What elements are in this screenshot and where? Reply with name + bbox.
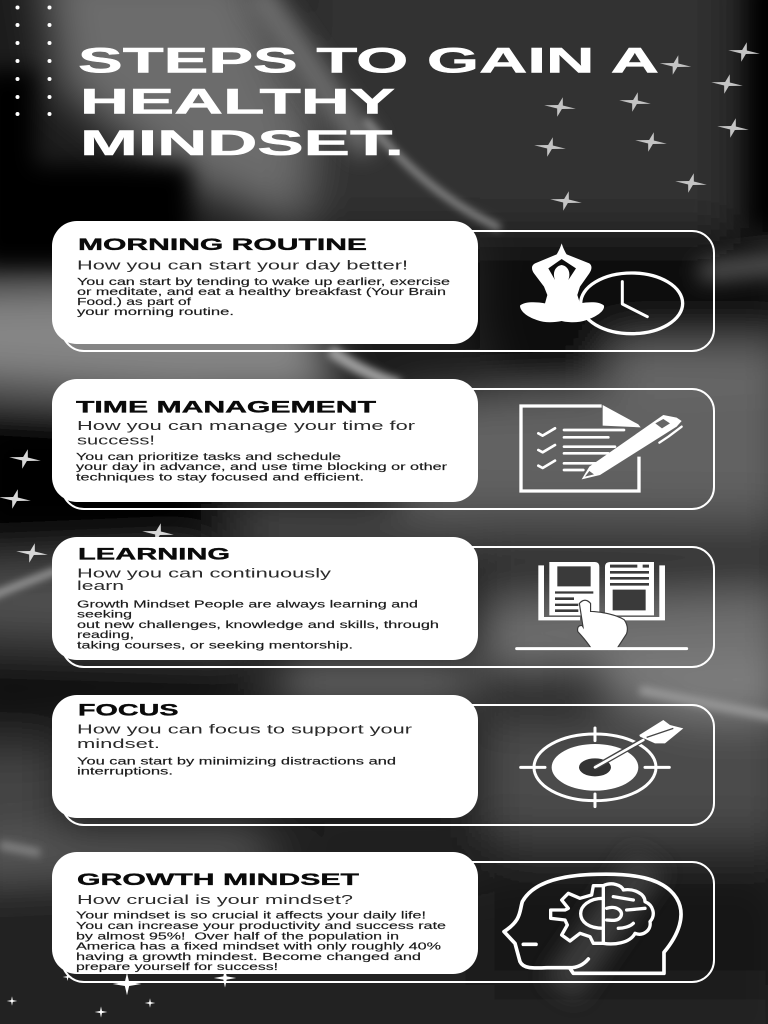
panel: growth mindset bbox=[52, 852, 714, 982]
heading: focus: FOCUS bbox=[78, 702, 178, 720]
body: learning: Growth Mindset People are always learning and bbox=[77, 600, 419, 610]
icon: meditating figure with clock bbox=[520, 243, 683, 334]
subtitle: learning: How you can continuously bbox=[77, 566, 332, 580]
panel: morning routine bbox=[52, 221, 714, 351]
star cluster top right bbox=[531, 41, 763, 212]
body: morning routine: or meditate, and eat a healthy breakfast (Your Brain bbox=[77, 287, 446, 298]
body: time management bbox=[76, 452, 448, 484]
body: growth mindset: by almost 95%! Over half of the population in bbox=[76, 932, 399, 942]
body: morning routine: your morning routine. bbox=[77, 307, 234, 318]
body: growth mindset: America has a fixed mindset with only roughly 40% bbox=[76, 942, 441, 952]
panel: focus bbox=[52, 695, 714, 825]
subtitle: morning routine: How you can start your day better! bbox=[77, 258, 408, 272]
subtitle: time management: How you can manage your time for bbox=[77, 418, 416, 433]
icon: open book with pointing hand bbox=[517, 562, 687, 649]
body: time management: techniques to stay focused and efficient. bbox=[76, 472, 364, 484]
title bbox=[78, 42, 659, 163]
panel: learning bbox=[52, 537, 714, 667]
title: STEPS TO GAIN A bbox=[78, 42, 659, 80]
star cluster left bbox=[0, 448, 177, 564]
subtitle: focus: mindset. bbox=[77, 736, 160, 751]
body: growth mindset: having a growth mindest. Become changed and bbox=[76, 952, 422, 963]
body: focus: You can start by minimizing distractions and bbox=[77, 756, 397, 768]
subtitle: growth mindset: How crucial is your mindset? bbox=[77, 892, 353, 907]
body: learning: out new challenges, knowledge and skills, through bbox=[77, 620, 439, 631]
title: HEALTHY bbox=[80, 82, 395, 122]
icon: target with arrow bbox=[521, 720, 683, 807]
title: MINDSET. bbox=[80, 124, 404, 163]
heading: growth mindset: GROWTH MINDSET bbox=[77, 871, 359, 889]
panel: time management bbox=[52, 379, 714, 509]
body: time management: your day in advance, and use time blocking or other bbox=[76, 462, 448, 473]
subtitle: time management bbox=[77, 418, 416, 448]
subtitle: learning bbox=[77, 566, 332, 593]
body: learning: reading, bbox=[77, 630, 134, 641]
icon: head with gear and brain bbox=[504, 874, 681, 973]
body: growth mindset bbox=[76, 910, 447, 973]
body: time management: You can prioritize tasks and schedule bbox=[76, 452, 342, 463]
icon: checklist and pen bbox=[521, 405, 682, 491]
subtitle: time management: success! bbox=[77, 432, 155, 448]
subtitle: focus bbox=[77, 722, 413, 751]
subtitle: learning: learn bbox=[77, 578, 124, 593]
body: growth mindset: Your mindset is so crucial it affects your daily life! bbox=[76, 910, 426, 922]
body: learning bbox=[77, 600, 439, 652]
decorative dot grid bbox=[16, 6, 52, 116]
sparkles bottom bbox=[7, 968, 236, 1018]
heading: learning: LEARNING bbox=[78, 546, 230, 564]
body: morning routine bbox=[77, 277, 451, 318]
heading: morning routine: MORNING ROUTINE bbox=[78, 236, 367, 254]
body: growth mindset: You can increase your productivity and success rate bbox=[76, 921, 447, 932]
body: learning: taking courses, or seeking mentorship. bbox=[77, 640, 353, 652]
heading: time management: TIME MANAGEMENT bbox=[76, 398, 376, 416]
body: focus: interruptions. bbox=[77, 766, 173, 778]
body: growth mindset: prepare yourself for success! bbox=[76, 962, 278, 973]
body: morning routine: You can start by tending to wake up earlier, exercise bbox=[77, 277, 451, 288]
subtitle: focus: How you can focus to support your bbox=[77, 722, 413, 736]
body: morning routine: Food.) as part of bbox=[77, 297, 191, 308]
body: focus bbox=[77, 756, 397, 778]
body: learning: seeking bbox=[77, 610, 133, 620]
